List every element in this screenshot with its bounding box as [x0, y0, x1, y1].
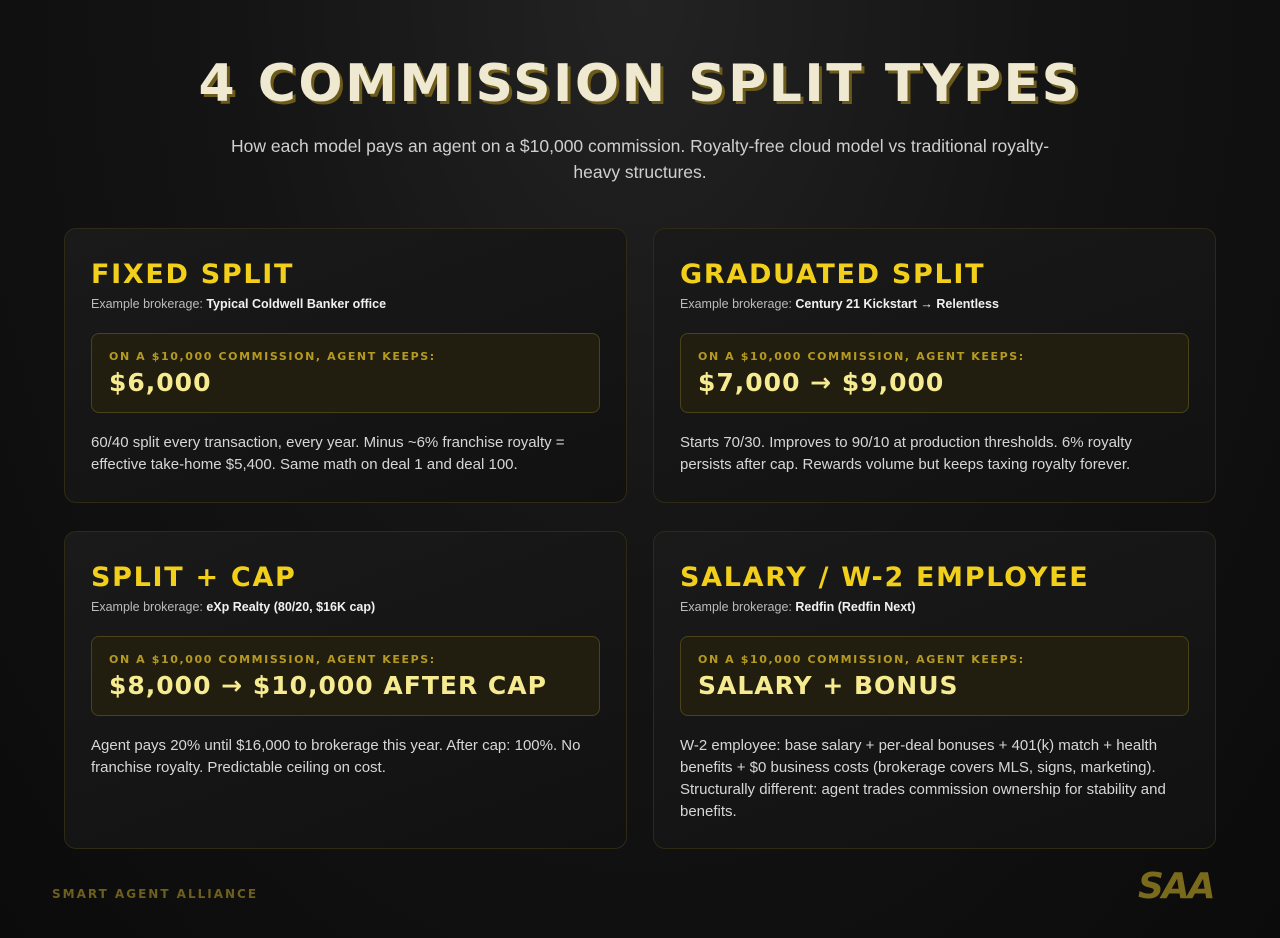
callout: $6,000: [109, 368, 211, 397]
callout: $7,000 → $9,000: [698, 368, 944, 397]
callout: [91, 636, 600, 716]
panel: salary: [653, 531, 1216, 849]
heading: FIXED SPLIT: [91, 259, 294, 290]
callout: $8,000 → $10,000 AFTER CAP: [109, 671, 547, 700]
heading: SALARY / W-2 EMPLOYEE: [680, 562, 1089, 593]
icon: SAA logo: SAA: [1138, 866, 1214, 907]
panel: fixed split: [64, 228, 627, 503]
example: Example brokerage: Century 21 Kickstart → Relentless: [680, 297, 999, 311]
callout: [680, 636, 1189, 716]
example: Example brokerage: Typical Coldwell Banker office: [91, 297, 386, 311]
callout: ON A $10,000 COMMISSION, AGENT KEEPS:: [109, 350, 436, 363]
callout: ON A $10,000 COMMISSION, AGENT KEEPS:: [698, 653, 1025, 666]
callout: ON A $10,000 COMMISSION, AGENT KEEPS:: [109, 653, 436, 666]
callout: [680, 333, 1189, 413]
subtitle: heavy structures.: [573, 162, 707, 182]
subtitle: [231, 136, 1049, 182]
panel: graduated split: [653, 228, 1216, 503]
callout: SALARY + BONUS: [698, 671, 959, 700]
text: Agent pays 20% until $16,000 to brokerage this year. After cap: 100%. No franchise royalty. Predictable ceiling on cost.: [91, 737, 580, 776]
text: W-2 employee: base salary + per-deal bonuses + 401(k) match + health benefits + $0 business costs (brokerage covers MLS, signs, marketing). Structurally different: agent trades commission ownership for stability and benefits.: [680, 737, 1166, 820]
text: 60/40 split every transaction, every year. Minus ~6% franchise royalty = effective take-home $5,400. Same math on deal 1 and deal 100.: [91, 434, 565, 473]
heading: SPLIT + CAP: [91, 562, 297, 593]
footer brand: SMART AGENT ALLIANCE: [52, 887, 258, 901]
text: Starts 70/30. Improves to 90/10 at production thresholds. 6% royalty persists after cap. Rewards volume but keeps taxing royalty forever.: [680, 434, 1132, 473]
callout: [91, 333, 600, 413]
callout: ON A $10,000 COMMISSION, AGENT KEEPS:: [698, 350, 1025, 363]
title: 4 COMMISSION SPLIT TYPES: [198, 54, 1082, 114]
example: Example brokerage: Redfin (Redfin Next): [680, 600, 915, 614]
heading: GRADUATED SPLIT: [680, 259, 985, 290]
panel: split + cap: [64, 531, 627, 849]
example: Example brokerage: eXp Realty (80/20, $16K cap): [91, 600, 375, 614]
subtitle: How each model pays an agent on a $10,000 commission. Royalty-free cloud model vs traditional royalty-: [231, 136, 1049, 156]
